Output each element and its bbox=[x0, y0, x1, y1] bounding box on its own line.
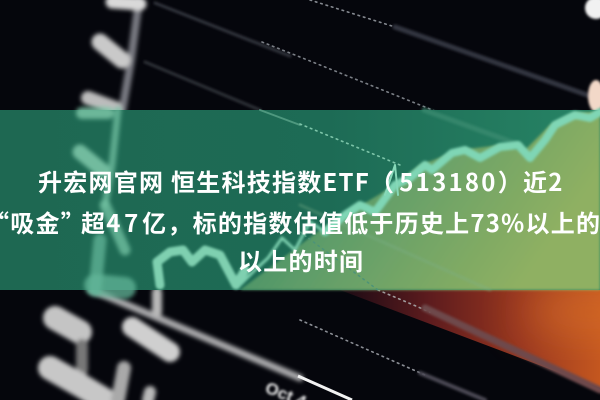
warm glow lower right bbox=[340, 288, 600, 388]
bottom-left candle blobs bbox=[50, 290, 300, 400]
title line 3: 以上的时间 bbox=[238, 242, 364, 277]
top right highlights bbox=[585, 0, 600, 112]
title line 2: “吸金”超47亿，标的指数估值低于历史上73%以上的 bbox=[0, 204, 600, 239]
title bbox=[0, 163, 600, 277]
green banner bbox=[0, 110, 600, 290]
banner chart line bbox=[80, 110, 600, 290]
axis tick bbox=[298, 376, 352, 400]
banner diagonal lines bbox=[260, 110, 520, 290]
dotted diagonal guide lines bbox=[145, 0, 600, 400]
title line 1: 升宏网官网 恒生科技指数ETF（513180）近2 bbox=[38, 163, 564, 198]
white chart line top bbox=[88, 0, 140, 112]
banner area fill under chart bbox=[240, 112, 600, 290]
